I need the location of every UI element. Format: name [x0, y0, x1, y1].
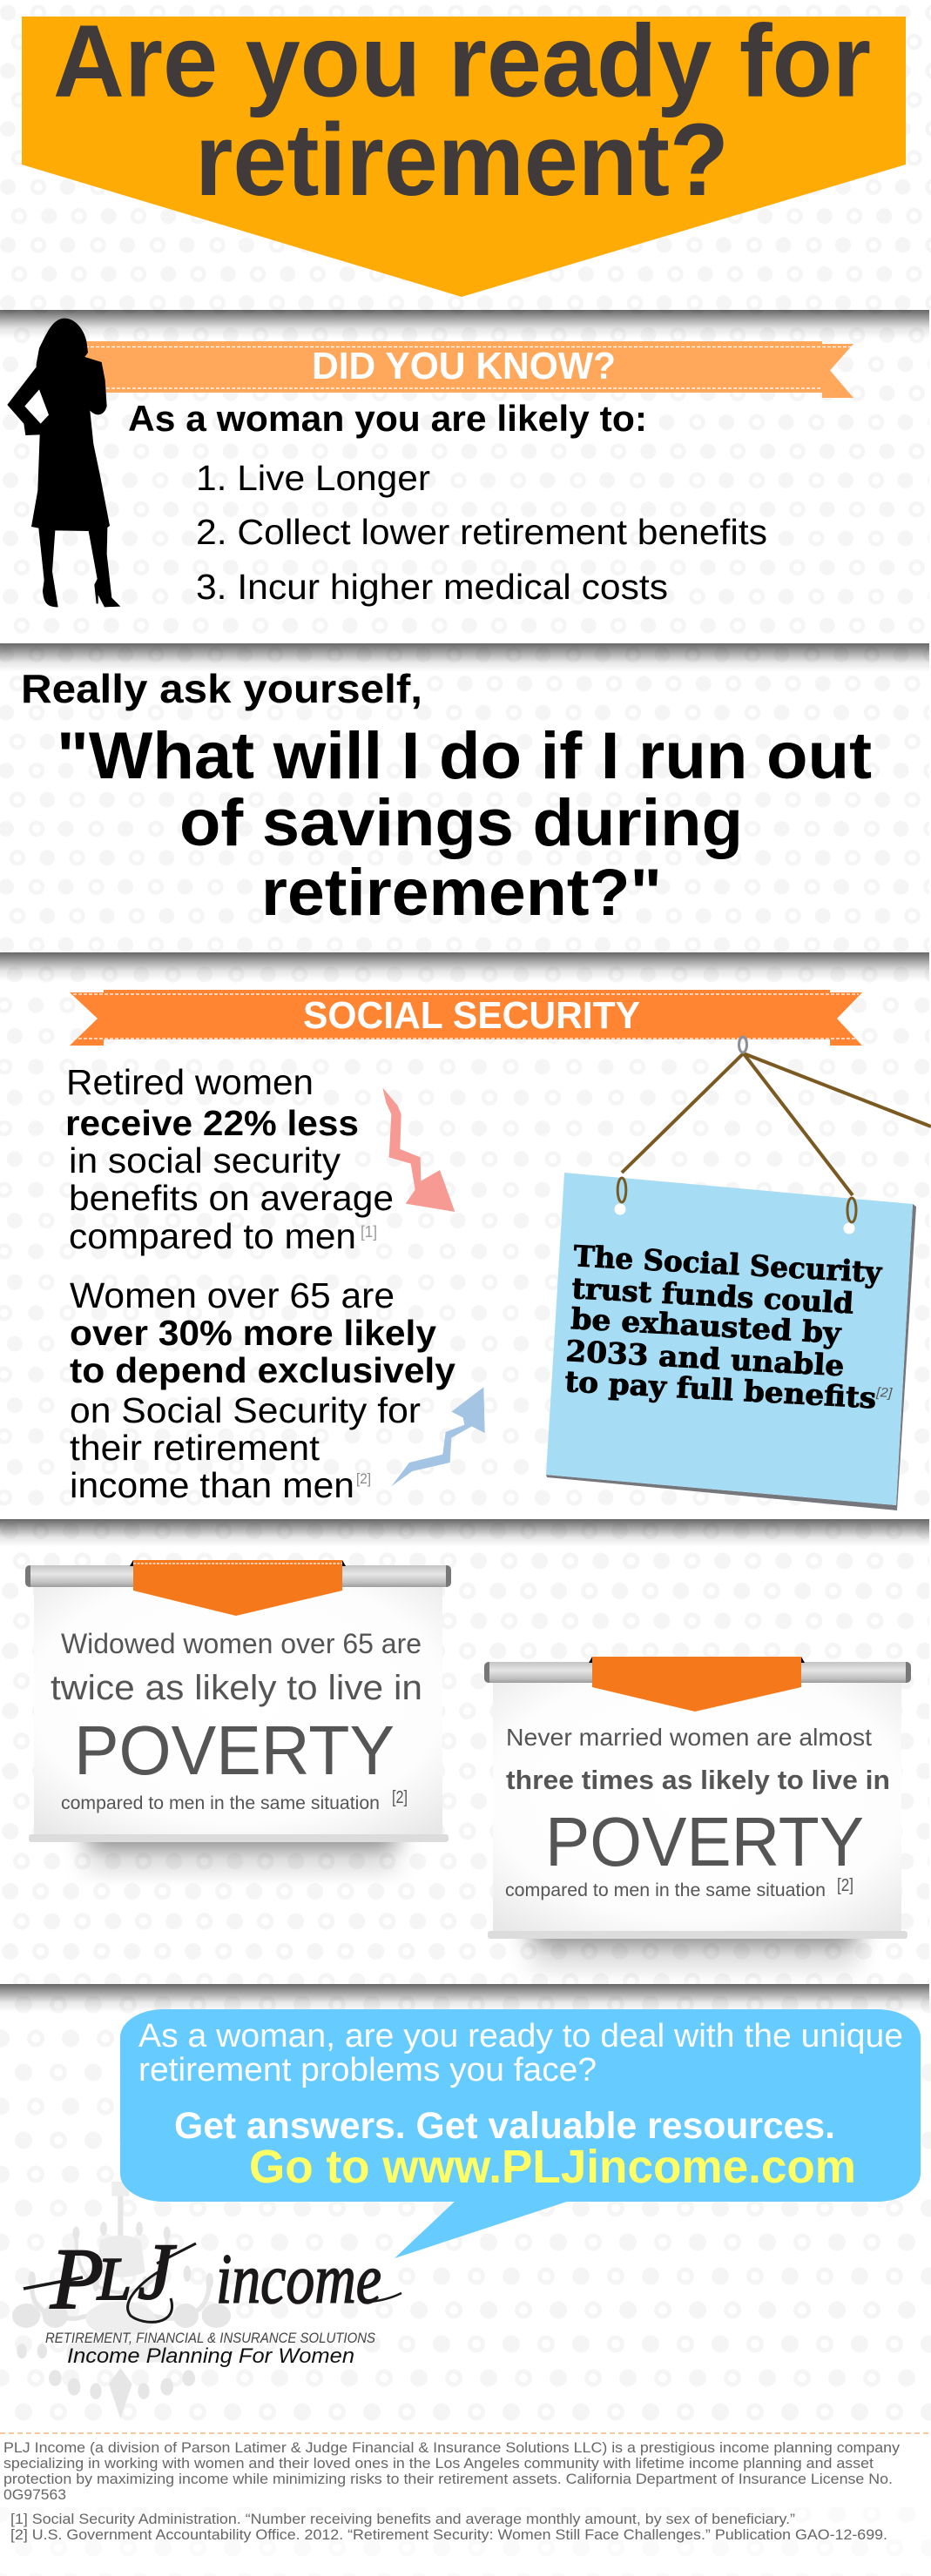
scroll text: three times as likely to live in [506, 1765, 890, 1795]
question: really ask yourself: retirement?" [261, 856, 662, 930]
scroll text: twice as likely to live in [51, 1669, 422, 1707]
icon: woman silhouette [7, 319, 120, 607]
question: really ask yourself: "What will I do if I run out [57, 719, 872, 793]
list: as a woman you are likely to: 3. Incur higher medical costs [196, 567, 668, 607]
bubble text: Go to www.PLJincome.com [249, 2141, 856, 2193]
text: women over 65: over 30% more likely [70, 1313, 436, 1353]
scroll text: [2] [837, 1876, 853, 1895]
scroll: widowed women [25, 1560, 451, 1886]
section shadow bands [0, 310, 929, 2012]
ribbon: social security [70, 990, 862, 1046]
text: retired women receive 22% less: compared to men [69, 1216, 356, 1256]
scroll text: POVERTY [74, 1712, 395, 1789]
footer: references: [2] U.S. Government Accountability Office. 2012. “Retirement Security: Women Still Face Challenges.” Publication GAO-12-699. [10, 2526, 887, 2543]
footer divider [0, 2432, 931, 2434]
logo tagline: Income Planning For Women [67, 2344, 354, 2368]
bubble text: retirement problems you face? [138, 2052, 597, 2088]
ribbon: did you know [85, 341, 853, 398]
title text: Are you ready for [53, 3, 871, 118]
footer: company description: 0G97563 [3, 2486, 66, 2503]
note ropes [622, 1053, 931, 1195]
text: retired women receive 22% less: [1] [361, 1223, 377, 1241]
scroll text: Widowed women over 65 are [61, 1628, 422, 1659]
note text: be exhausted by [570, 1301, 842, 1350]
text: women over 65: their retirement [70, 1428, 320, 1468]
scroll text: compared to men in the same situation [505, 1880, 826, 1900]
scroll text: [2] [392, 1788, 408, 1807]
logo: PLJ income: L [97, 2246, 132, 2313]
icon: blue up arrow [391, 1387, 485, 1486]
ribbon: did you know: DID YOU KNOW? [312, 345, 616, 387]
logo: PLJ income: P [50, 2230, 104, 2327]
footer: references: [1] Social Security Administration. “Number receiving benefits and average monthly amount, by sex of beneficiary.” [10, 2511, 795, 2527]
text: women over 65: to depend exclusively [70, 1350, 455, 1390]
note text: [2] [875, 1385, 894, 1401]
scroll tab [589, 1657, 805, 1712]
footer: references [10, 2511, 887, 2543]
text: women over 65: on Social Security for [70, 1390, 421, 1430]
title banner [22, 3, 906, 297]
icon: pink down arrow [382, 1087, 455, 1212]
text: women over 65: income than men [70, 1465, 354, 1505]
bubble text [138, 2018, 903, 2193]
text: retired women receive 22% less: in social security [69, 1140, 341, 1180]
logo: PLJ income: income [216, 2239, 381, 2318]
scroll text: compared to men in the same situation [61, 1793, 380, 1813]
list: as a woman you are likely to: As a woman you are likely to: [128, 398, 647, 439]
hanging note: social security trust funds [546, 1037, 931, 1510]
logo tagline [45, 2331, 375, 2368]
note text: trust funds could [571, 1271, 854, 1321]
note text: The Social Security [573, 1239, 883, 1289]
logo: PLJ income: J [138, 2227, 177, 2316]
note text: 2033 and unable [565, 1334, 845, 1382]
title text: retirement? [195, 103, 729, 218]
speech bubble call to action [120, 2009, 921, 2258]
scroll tab [130, 1560, 346, 1616]
note text: to pay full benefits [564, 1364, 877, 1415]
ribbon: social security: SOCIAL SECURITY [303, 994, 640, 1037]
scroll text: POVERTY [545, 1803, 864, 1880]
text: women over 65 [70, 1275, 455, 1505]
text: women over 65: Women over 65 are [70, 1275, 395, 1315]
scroll: never married women [484, 1657, 911, 1982]
bubble text: Get answers. Get valuable resources. [174, 2105, 835, 2147]
text: retired women receive 22% less: Retired women [66, 1062, 314, 1102]
footer: company description: specializing in working with women and their loved ones in the Los Angeles community with lifetime income planning and asset [3, 2455, 874, 2472]
question: really ask yourself [21, 666, 872, 930]
title text [53, 3, 871, 218]
text: women over 65: [2] [356, 1470, 371, 1487]
logo tagline: RETIREMENT, FINANCIAL & INSURANCE SOLUTIONS [45, 2331, 375, 2346]
scroll text [51, 1628, 422, 1813]
list: as a woman you are likely to [128, 398, 767, 607]
footer: company description: PLJ Income (a division of Parson Latimer & Judge Financial & Insurance Solutions LLC) is a prestigious income planning company [3, 2439, 901, 2456]
logo: PLJ income [24, 2227, 401, 2368]
text: retired women receive 22% less: benefits on average [69, 1178, 394, 1218]
note text [564, 1239, 894, 1415]
logo chandelier [12, 2182, 231, 2418]
list: as a woman you are likely to: 2. Collect lower retirement benefits [196, 512, 767, 552]
footer: company description [3, 2439, 901, 2503]
scroll text: Never married women are almost [506, 1724, 872, 1751]
question: really ask yourself: Really ask yourself, [21, 666, 422, 711]
footer: company description: protection by maximizing income while minimizing risks to their retirement assets. California Department of Insurance License No. [3, 2471, 893, 2487]
text: retired women receive 22% less: receive 22% less [65, 1103, 359, 1143]
bubble text: As a woman, are you ready to deal with the unique [138, 2018, 903, 2055]
text: retired women receive 22% less [65, 1062, 394, 1256]
list: as a woman you are likely to: 1. Live Longer [196, 458, 430, 498]
question: really ask yourself: of savings during [179, 786, 743, 860]
scroll text [505, 1724, 890, 1900]
